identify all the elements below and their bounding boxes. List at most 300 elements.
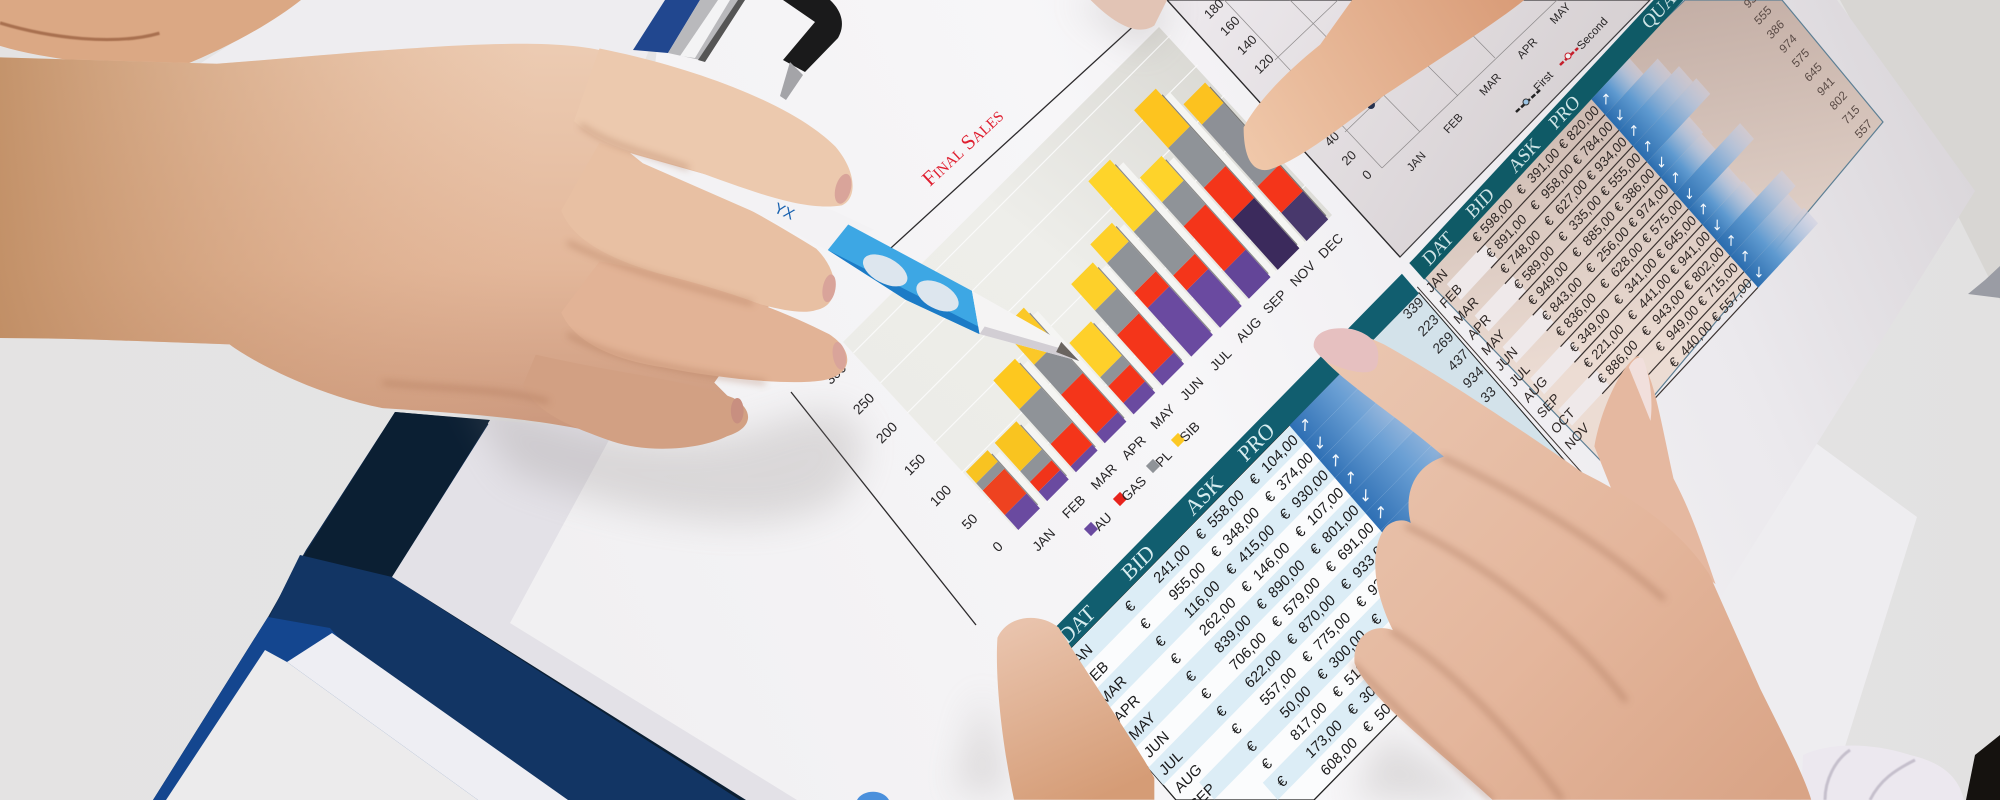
table rows: 241,00: [1151, 541, 1194, 587]
line chart y axis labels: 0: [1359, 167, 1375, 183]
line chart y axis labels: 20: [1338, 147, 1359, 168]
table rows: €: [1314, 665, 1331, 684]
month labels: JUN: [1177, 374, 1206, 403]
line chart box, top right: [1167, 0, 1650, 257]
table rows: €: [1277, 505, 1294, 524]
table rows: €: [1292, 522, 1309, 542]
table rows: APR: [1111, 692, 1144, 727]
table rows: 885,00: [1580, 208, 1618, 249]
table rows: 949,00: [1663, 302, 1701, 343]
value axis labels: 300: [822, 359, 850, 387]
table rows: 801,00: [1319, 501, 1362, 547]
right hand: [1314, 328, 1811, 800]
upper right desk shade: [1840, 0, 2000, 300]
table rows: €: [1238, 577, 1256, 597]
table rows: €: [1360, 718, 1377, 737]
table rows: 440,00: [1677, 318, 1715, 359]
line chart x axis labels: APR: [1515, 36, 1540, 62]
left-hand nails: [731, 172, 854, 423]
value axis labels: 100: [927, 481, 955, 509]
table rows: €: [1344, 700, 1362, 719]
table rows: 579,00: [1280, 574, 1324, 620]
bar JUL: [1090, 217, 1219, 357]
table rows: €: [1567, 339, 1582, 356]
pen cone: [972, 291, 1079, 361]
hand shadows on paper: [459, 0, 1492, 800]
line chart x axis labels: MAR: [1478, 72, 1504, 98]
bar AUG: [1088, 154, 1247, 328]
stacked bar chart: [822, 27, 1346, 555]
quantity column: 645: [1802, 59, 1825, 85]
table rows: 557,00: [1717, 275, 1755, 317]
line chart series markers: [1353, 0, 1375, 109]
table rows: €: [1652, 338, 1668, 355]
table body background: [1410, 0, 1883, 460]
table rows: €: [1667, 261, 1682, 278]
clipboard metal clip: [633, 0, 842, 100]
table rows: JUL: [1156, 747, 1186, 779]
header labels: DAT: [1054, 599, 1100, 649]
quantity column: 802: [1827, 88, 1850, 113]
trend arrows: ↗: [1639, 136, 1657, 157]
finger 3: [561, 261, 847, 382]
month labels: JAN: [1029, 525, 1058, 554]
table rows: 870,00: [1296, 592, 1339, 637]
table rows: JAN: [1065, 641, 1096, 674]
value axis labels: 200: [873, 418, 901, 446]
header band: [1048, 274, 1419, 654]
line chart y axis labels: 40: [1321, 128, 1342, 149]
far right number column: 33: [1477, 383, 1499, 406]
finger separations: [1352, 457, 1665, 800]
quantity column: 575: [1789, 45, 1812, 70]
bar APR: [1002, 302, 1132, 443]
table rows: €: [1137, 614, 1154, 634]
table rows: €: [1322, 557, 1340, 577]
table rows: €: [1597, 275, 1612, 292]
table rows: €: [1122, 597, 1139, 616]
table rows: FEB: [1080, 658, 1112, 692]
table rows: 843,00: [1547, 274, 1585, 316]
far column tint: [1363, 293, 1603, 563]
bar JUN: [1071, 257, 1190, 386]
table rows: €: [1338, 575, 1355, 594]
quantity column: 974: [1777, 31, 1800, 56]
table rows: 974,00: [1633, 181, 1671, 222]
trend arrows: ↙: [1309, 430, 1331, 454]
value axis labels: 0: [989, 538, 1006, 555]
table rows: €: [1198, 685, 1215, 704]
table rows: 930,00: [1289, 466, 1332, 512]
table rows: 645,00: [1661, 212, 1699, 254]
table rows: 348,00: [1220, 504, 1263, 549]
table rows: 589,00: [1519, 243, 1557, 284]
line chart x axis labels: FEB: [1442, 111, 1466, 136]
table rows: €: [1299, 647, 1316, 667]
month labels: AUG: [1233, 314, 1264, 345]
table rows: 335,00: [1566, 192, 1604, 234]
table rows: AUG: [1171, 761, 1205, 797]
table rows: €: [1183, 667, 1200, 686]
table rows: 775,00: [1311, 609, 1354, 655]
table rows: JAN: [1423, 266, 1450, 296]
hand body: [1314, 332, 1811, 800]
table rows: MAR: [1451, 294, 1481, 327]
table rows: JUN: [1493, 344, 1520, 374]
header labels: [1419, 0, 1680, 270]
table rows: 518,00: [1341, 644, 1384, 690]
pen blue grip: [828, 224, 980, 334]
table rows: €: [1709, 308, 1724, 325]
bar DEC: [1183, 82, 1329, 241]
table rows: €: [1583, 167, 1599, 184]
plot background: [843, 27, 1332, 530]
table rows: 622,00: [1242, 646, 1285, 692]
table rows: 391,00: [1524, 145, 1562, 186]
table rows: €: [1243, 737, 1261, 756]
table rows: €: [1268, 612, 1286, 632]
line chart x axis labels: [1405, 1, 1574, 174]
alternating light cells: [1447, 244, 1609, 426]
table rows: €: [1469, 229, 1485, 246]
row bands: [1058, 424, 1458, 800]
paper stack under report: [392, 420, 800, 800]
table rows: 934,00: [1592, 134, 1630, 175]
trend arrows: ↗: [1294, 413, 1316, 437]
value axis labels: [822, 359, 1006, 555]
table rows: €: [1553, 323, 1568, 340]
table rows: 221,00: [1589, 321, 1627, 363]
table rows: 628,00: [1608, 239, 1646, 281]
header labels: BID: [1462, 184, 1498, 223]
table rows: 146,00: [1250, 539, 1293, 585]
table rows: 802,00: [1689, 244, 1727, 285]
table rows: 575,00: [1647, 197, 1685, 238]
table rows: €: [1569, 244, 1584, 261]
clipboard folder: [153, 412, 800, 800]
trend arrows: ↙: [1354, 483, 1376, 507]
value axis labels: 150: [901, 450, 929, 478]
trend arrows: ↗: [1339, 465, 1361, 489]
quarter fade bars: [1591, 29, 1823, 288]
table rows: 341,00: [1622, 255, 1660, 296]
table rows: 558,00: [1204, 486, 1248, 532]
table rows: €: [1193, 525, 1210, 544]
table rows: 817,00: [1287, 699, 1330, 745]
header labels: DAT: [1419, 227, 1458, 270]
top-left fingers: [0, 0, 301, 71]
trend arrows: ↗: [1597, 89, 1615, 110]
table rows: €: [1580, 354, 1596, 371]
table rows: 300,00: [1326, 627, 1369, 672]
chart legend: AU: [1091, 510, 1115, 534]
table rows: €: [1223, 560, 1240, 579]
table rows: APR: [1465, 311, 1494, 343]
finger creases: [383, 242, 765, 402]
trend arrows: ↗: [1369, 500, 1391, 524]
trend arrows: ↙: [1708, 215, 1727, 235]
quantity column: 941: [1814, 74, 1837, 99]
table rows: 50,00: [1277, 682, 1314, 722]
table rows: 691,00: [1334, 519, 1377, 565]
far right number column: 269: [1430, 328, 1457, 357]
table rows: €: [1228, 720, 1246, 739]
table rows: 104,00: [1258, 431, 1302, 477]
month labels: JUL: [1207, 346, 1235, 374]
header labels: ASK: [1505, 134, 1545, 178]
month labels: FEB: [1059, 492, 1088, 521]
trend arrows: ↗: [1324, 448, 1346, 472]
table rows: €: [1527, 197, 1543, 214]
table rows: €: [1513, 181, 1529, 198]
right data table: [1403, 0, 1893, 478]
line chart legend: [1516, 16, 1610, 112]
table rows: JUN: [1141, 728, 1173, 762]
trend arrows: ↙: [1385, 518, 1407, 542]
table rows: FEB: [1437, 281, 1465, 311]
trend arrows: ↗: [1736, 246, 1754, 267]
table rows: MAY: [1479, 327, 1508, 358]
month labels: SEP: [1260, 287, 1290, 317]
month labels: MAR: [1088, 461, 1120, 493]
finger 1: [574, 48, 853, 207]
table rows: €: [1167, 649, 1185, 669]
table rows: €: [1594, 370, 1610, 387]
table rows: 256,00: [1594, 223, 1632, 265]
far right number column: 339: [1400, 293, 1427, 322]
row rules: [1417, 99, 1760, 478]
left data table: [1040, 274, 1603, 800]
table rows: MAY: [1126, 709, 1159, 744]
table rows: €: [1253, 595, 1271, 614]
pen brand mark: YX: [771, 200, 797, 224]
table rows: €: [1213, 702, 1230, 721]
bar FEB: [995, 415, 1075, 501]
table rows: €: [1653, 246, 1668, 263]
line chart y axis labels: 120: [1251, 51, 1277, 77]
table rows: €: [1259, 755, 1276, 774]
table rows: 820,00: [1564, 102, 1602, 144]
left hand palm and forearm: [0, 44, 778, 443]
table rows: €: [1625, 214, 1641, 231]
table rows: 262,00: [1196, 594, 1239, 639]
table rows: 934,00: [1365, 554, 1408, 600]
table rows: €: [1284, 630, 1301, 649]
table rows: 107,00: [1304, 484, 1347, 530]
table rows: 943,00: [1649, 286, 1687, 328]
line chart x axis labels: JAN: [1405, 150, 1429, 174]
table rows: 891,00: [1491, 211, 1529, 253]
table rows: 557,00: [1257, 664, 1300, 710]
month labels: MAY: [1148, 402, 1178, 432]
table rows: OCT: [1548, 405, 1577, 437]
left table body: [1057, 293, 1603, 800]
value axis labels: 50: [958, 510, 981, 533]
table rows: 555,00: [1605, 150, 1644, 191]
far right number column: [1400, 293, 1502, 409]
table rows: 269,00: [1395, 589, 1438, 635]
bar SEP: [1140, 150, 1276, 299]
table rows: €: [1511, 276, 1526, 293]
pen: [630, 153, 1079, 361]
thumb upper: [1594, 356, 1716, 584]
quantity column: [1739, 0, 1875, 142]
table rows: €: [1541, 212, 1557, 230]
table rows: €: [1695, 293, 1710, 310]
header labels: PRO: [1233, 417, 1279, 466]
table rows: €: [1353, 592, 1370, 612]
table rows: JUL: [1506, 361, 1533, 390]
table rows: €: [1497, 260, 1512, 277]
small blue object at bottom edge: [857, 792, 889, 800]
table rows: €: [1307, 540, 1325, 559]
trend arrows: ↗: [1722, 231, 1741, 251]
line chart x axis labels: MAY: [1548, 1, 1574, 27]
far right number column: 223: [1415, 311, 1442, 339]
trend arrows: [1294, 413, 1407, 542]
trend arrows: ↙: [1652, 152, 1671, 173]
table rows: NOV: [1562, 420, 1592, 453]
table rows: €: [1262, 487, 1279, 507]
grid lines: [853, 35, 1306, 503]
table rows: €: [1681, 277, 1696, 294]
table rows: AUG: [1520, 373, 1550, 406]
table rows: 784,00: [1578, 118, 1616, 160]
table rows: 955,00: [1166, 559, 1209, 604]
header labels: PRO: [1545, 91, 1584, 134]
quantity column: 386: [1764, 17, 1787, 42]
chart legend: [1084, 419, 1203, 536]
quantity column: 557: [1852, 116, 1875, 142]
line chart legend: First: [1532, 69, 1556, 94]
table rows: [1423, 102, 1755, 468]
table rows: €: [1639, 230, 1654, 247]
chart box frame: [791, 0, 1400, 625]
table rows: 386,00: [1619, 165, 1657, 207]
table rows: MAR: [1095, 672, 1130, 709]
pointing finger top: [1091, 0, 1524, 170]
table rows: 500,00: [1372, 679, 1415, 725]
quantity column: 715: [1839, 102, 1863, 127]
finger 2: [561, 143, 835, 312]
upper thumb nail: [1629, 358, 1651, 421]
table rows: 706,00: [1226, 629, 1270, 675]
table rows: 349,00: [1575, 305, 1613, 347]
table rows: 598,00: [1477, 195, 1515, 237]
table rows: €: [1383, 628, 1401, 647]
line chart y axis labels: 140: [1234, 32, 1260, 58]
table rows: SEP: [1534, 390, 1563, 421]
header labels: ASK: [1180, 470, 1227, 520]
table rows: 949,00: [1533, 258, 1571, 300]
header band: [1410, 0, 1721, 280]
bar JAN: [966, 444, 1046, 530]
quantity column: 555: [1751, 2, 1775, 28]
table rows: €: [1611, 198, 1627, 216]
table rows: €: [1666, 354, 1682, 371]
table rows: 441,00: [1636, 271, 1674, 312]
table rows: 627,00: [1552, 176, 1590, 218]
table rows: €: [1611, 291, 1626, 308]
trend arrows: ↗: [1625, 121, 1643, 141]
index nail: [1314, 328, 1378, 372]
month labels: DEC: [1315, 230, 1346, 261]
trend arrows: ↗: [1666, 168, 1685, 188]
month labels: NOV: [1287, 258, 1318, 289]
line chart y axis labels: 160: [1217, 13, 1243, 39]
table rows: 839,00: [1211, 611, 1254, 657]
pen tip: [1056, 342, 1079, 361]
bar NOV: [1134, 83, 1305, 270]
month labels: [1029, 230, 1346, 554]
trend arrows: [1597, 89, 1768, 283]
trend fade bars: [1289, 333, 1487, 548]
table rows: 748,00: [1505, 227, 1543, 268]
table rows: 941,00: [1675, 228, 1713, 270]
month labels: APR: [1119, 433, 1149, 463]
table rows: 836,00: [1561, 290, 1599, 331]
table rows: €: [1597, 183, 1613, 200]
table rows: 890,00: [1265, 556, 1308, 602]
table rows: [1065, 431, 1469, 800]
top-left sheet behind hand: [190, 0, 670, 120]
chart legend: GAS: [1118, 473, 1149, 504]
header labels: [1054, 417, 1279, 649]
table rows: €: [1274, 772, 1291, 791]
table rows: €: [1570, 151, 1585, 168]
far right number column: 437: [1445, 345, 1472, 374]
stacked white pages bottom left: [166, 633, 568, 800]
table rows: €: [1246, 470, 1264, 489]
table rows: €: [1368, 610, 1385, 629]
second sheet right: [1480, 430, 1917, 800]
table rows: 374,00: [1274, 449, 1317, 494]
far right number column: 934: [1460, 362, 1487, 391]
table rows: 886,00: [1603, 337, 1641, 378]
finger 4: [523, 355, 748, 449]
table rows: €: [1639, 322, 1654, 339]
table rows: €: [1583, 260, 1598, 277]
table rows: €: [1625, 307, 1640, 324]
table rows: €: [1555, 228, 1571, 245]
table rows: €: [1556, 136, 1571, 153]
table rows: 933,00: [1349, 537, 1393, 582]
value axis labels: 250: [850, 389, 878, 417]
bar MAY: [1069, 316, 1161, 414]
main report sheet: [510, 0, 1975, 800]
table rows: 715,00: [1703, 259, 1741, 301]
table rows: €: [1152, 632, 1170, 651]
forearm shading: [0, 44, 778, 443]
chart legend: PL: [1153, 447, 1175, 470]
trend arrows: ↗: [1694, 199, 1713, 220]
header labels: BID: [1116, 539, 1159, 585]
trend arrows: ↙: [1611, 105, 1629, 125]
pen grip pads: [858, 248, 913, 293]
pen barrel: [630, 153, 874, 251]
finger 1 crease: [580, 125, 689, 168]
chart legend: SIB: [1177, 419, 1203, 445]
table rows: €: [1483, 244, 1499, 261]
table rows: 415,00: [1235, 521, 1278, 567]
blouse cuff bottom right: [1801, 735, 2000, 800]
table rows: 173,00: [1302, 717, 1346, 762]
table rows: 116,00: [1181, 577, 1223, 622]
table rows: €: [1208, 542, 1225, 562]
pen clip at right edge: [1968, 266, 2000, 298]
lower thumb: [997, 618, 1154, 800]
trend arrows: ↙: [1750, 262, 1768, 283]
